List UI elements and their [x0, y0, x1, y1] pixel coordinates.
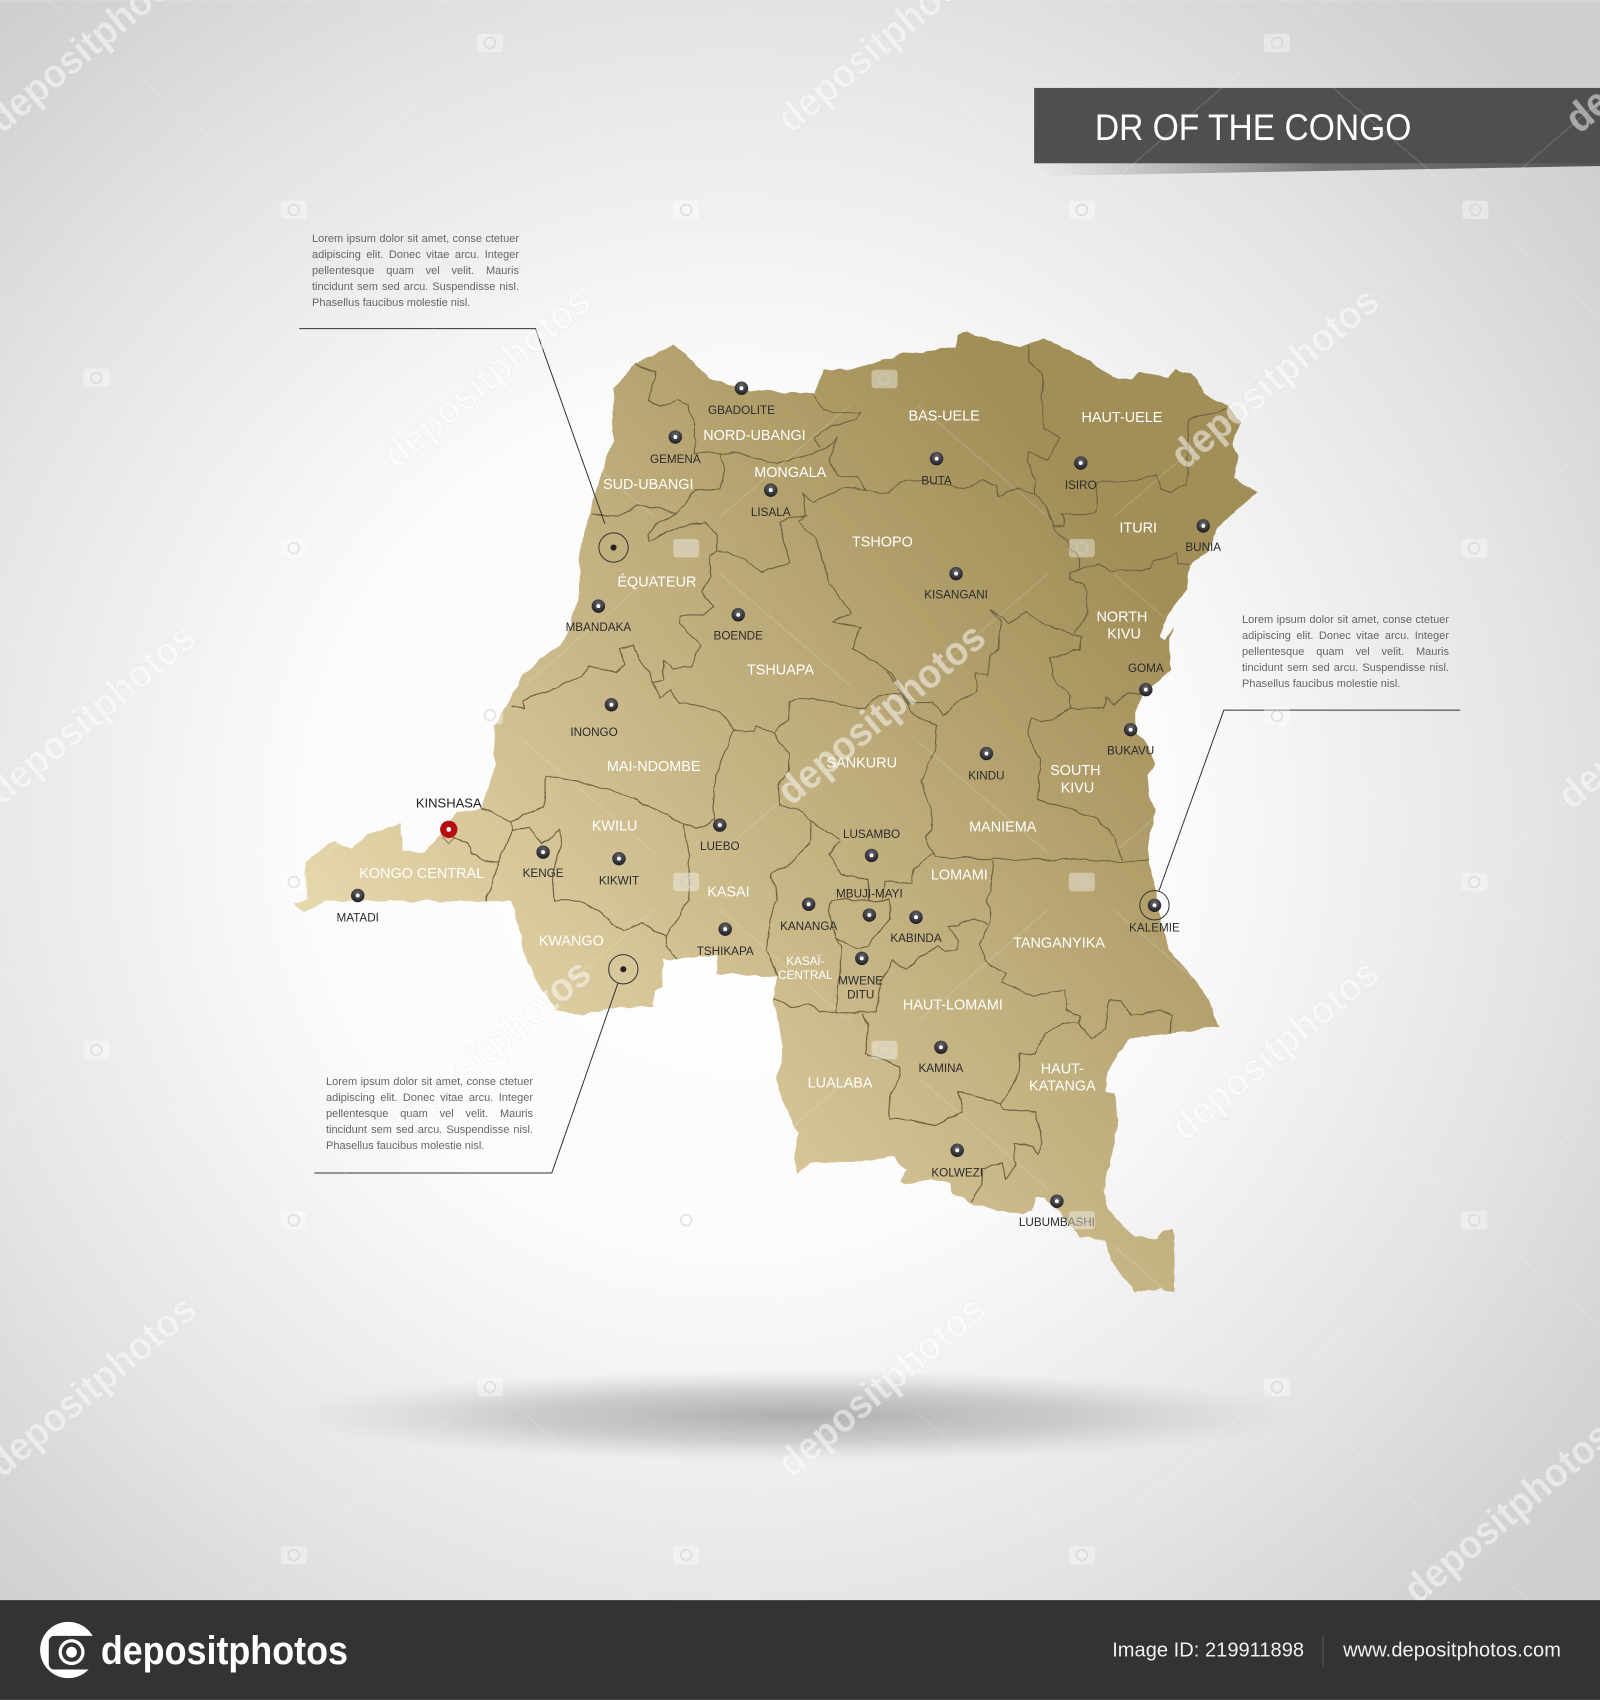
cities: KALEMIE	[1129, 921, 1180, 934]
text block north-west: adipiscing elit. Donec vitae arcu. Integer	[312, 249, 519, 261]
cities: MBANDAKA	[566, 621, 631, 634]
title banner	[1034, 88, 1600, 163]
cities: KISANGANI	[924, 589, 988, 602]
region names: TSHUAPA	[747, 662, 814, 678]
cities: MBUJI-MAYI	[836, 888, 903, 901]
cities: TSHIKAPA	[697, 945, 754, 958]
text block south-west: adipiscing elit. Donec vitae arcu. Integer	[326, 1092, 533, 1104]
region borders, east	[797, 346, 1227, 862]
footer logo: depositphotos	[101, 1629, 348, 1673]
region names: NORTH	[1096, 609, 1147, 625]
region names: ITURI	[1119, 520, 1157, 536]
cities: KENGE	[523, 867, 564, 880]
callout line east	[1140, 710, 1460, 920]
region names: ÉQUATEUR	[617, 574, 696, 591]
region names: KATANGA	[1029, 1079, 1096, 1095]
title banner shadow	[1034, 163, 1600, 176]
text block east: Phasellus faucibus molestie nisl.	[1242, 678, 1400, 690]
callout line south-west	[314, 955, 638, 1173]
cities: KINDU	[968, 770, 1005, 783]
region names: LOMAMI	[931, 867, 988, 883]
cities: KAMINA	[919, 1062, 964, 1075]
region names: HAUT-UELE	[1082, 410, 1162, 426]
cities: DITU	[847, 989, 874, 1002]
watermarks: depositphotos	[1162, 951, 1387, 1150]
title: DR OF THE CONGO	[1095, 107, 1411, 148]
region names: KASAI	[707, 885, 750, 901]
text block east	[1242, 614, 1449, 690]
website: www.depositphotos.com	[1342, 1640, 1561, 1662]
cities: GEMENA	[650, 453, 701, 466]
cities: LUSAMBO	[843, 828, 900, 841]
cities: KABINDA	[890, 932, 942, 945]
cities: KOLWEZI	[931, 1166, 983, 1179]
region names	[359, 409, 1162, 1095]
text block north-west	[312, 233, 519, 309]
region names: BAS-UELE	[909, 409, 980, 425]
footer logo	[40, 1622, 348, 1678]
region names: KWANGO	[539, 933, 604, 949]
footer bar	[0, 1600, 1600, 1700]
text block north-west: tincidunt sem sed arcu. Suspendisse nisl.	[312, 281, 519, 293]
text block north-west: Phasellus faucibus molestie nisl.	[312, 297, 470, 309]
region names: KIVU	[1107, 627, 1141, 643]
cities: BUNIA	[1185, 541, 1221, 554]
cities: GBADOLITE	[708, 404, 775, 417]
cities: MATADI	[337, 912, 379, 925]
region names: LUALABA	[808, 1075, 873, 1091]
cities: LUBUMBASHI	[1019, 1216, 1095, 1229]
region names: SANKURU	[827, 756, 897, 772]
region names: KONGO CENTRAL	[359, 866, 484, 882]
cities: LISALA	[751, 506, 791, 519]
region names: NORD-UBANGI	[703, 428, 806, 444]
cities: BOENDE	[714, 630, 763, 643]
region names: HAUT-LOMAMI	[903, 997, 1003, 1013]
text block south-west: pellentesque quam vel velit. Mauris	[326, 1108, 533, 1120]
region names: KASAÏ-	[786, 955, 825, 968]
cities: KIKWIT	[599, 875, 639, 888]
text block south-west: tincidunt sem sed arcu. Suspendisse nisl.	[326, 1124, 533, 1136]
watermarks: depositphotos	[1162, 279, 1387, 477]
text block north-west: pellentesque quam vel velit. Mauris	[312, 265, 519, 277]
region names: KIVU	[1061, 781, 1094, 797]
text block south-west: Phasellus faucibus molestie nisl.	[326, 1140, 484, 1152]
watermarks: depositphotos	[769, 1287, 994, 1486]
region names: TSHOPO	[852, 534, 913, 550]
region names: MAI-NDOMBE	[607, 759, 700, 775]
region names: MANIEMA	[969, 820, 1037, 836]
cities: ISIRO	[1065, 479, 1097, 492]
text block east: Lorem ipsum dolor sit amet, conse ctetuer	[1242, 614, 1449, 626]
cities: BUKAVU	[1107, 745, 1154, 758]
cities: GOMA	[1128, 662, 1164, 675]
region borders, west	[450, 365, 914, 977]
text block east: pellentesque quam vel velit. Mauris	[1242, 646, 1449, 658]
region names: CENTRAL	[778, 969, 833, 982]
cities: LUEBO	[700, 840, 740, 853]
map of DR Congo	[294, 331, 1259, 1293]
watermarks: depositphotos	[374, 279, 599, 477]
cities: INONGO	[570, 726, 618, 739]
capital: Kinshasa	[416, 796, 482, 843]
text block north-west: Lorem ipsum dolor sit amet, conse ctetuer	[312, 233, 519, 245]
region names: KWILU	[592, 818, 637, 834]
text block south-west	[326, 1076, 533, 1152]
callout line north-west	[299, 329, 628, 562]
watermark camera icons	[83, 34, 1488, 1564]
region names: SOUTH	[1050, 763, 1101, 779]
cities: KANANGA	[780, 920, 837, 933]
watermarks: depositphotos	[374, 951, 599, 1150]
region names: SUD-UBANGI	[603, 477, 693, 493]
country outline	[294, 331, 1259, 1293]
cities: BUTA	[921, 475, 952, 488]
cities: MWENE	[838, 974, 883, 987]
country shape and borders	[294, 331, 1259, 1293]
text block east: tincidunt sem sed arcu. Suspendisse nisl.	[1242, 662, 1449, 674]
region names: TANGANYIKA	[1013, 936, 1105, 952]
region names: HAUT-	[1041, 1061, 1084, 1077]
cities	[337, 381, 1221, 1229]
capital: Kinshasa: KINSHASA	[416, 796, 482, 811]
text block south-west: Lorem ipsum dolor sit amet, conse ctetuer	[326, 1076, 533, 1088]
ground shadow	[287, 1370, 1306, 1461]
image id: Image ID: 219911898	[1112, 1640, 1304, 1662]
watermarks: depositphotos	[769, 615, 994, 814]
region borders, south	[773, 840, 1173, 1202]
text block east: adipiscing elit. Donec vitae arcu. Integer	[1242, 630, 1449, 642]
region names: MONGALA	[754, 465, 827, 481]
